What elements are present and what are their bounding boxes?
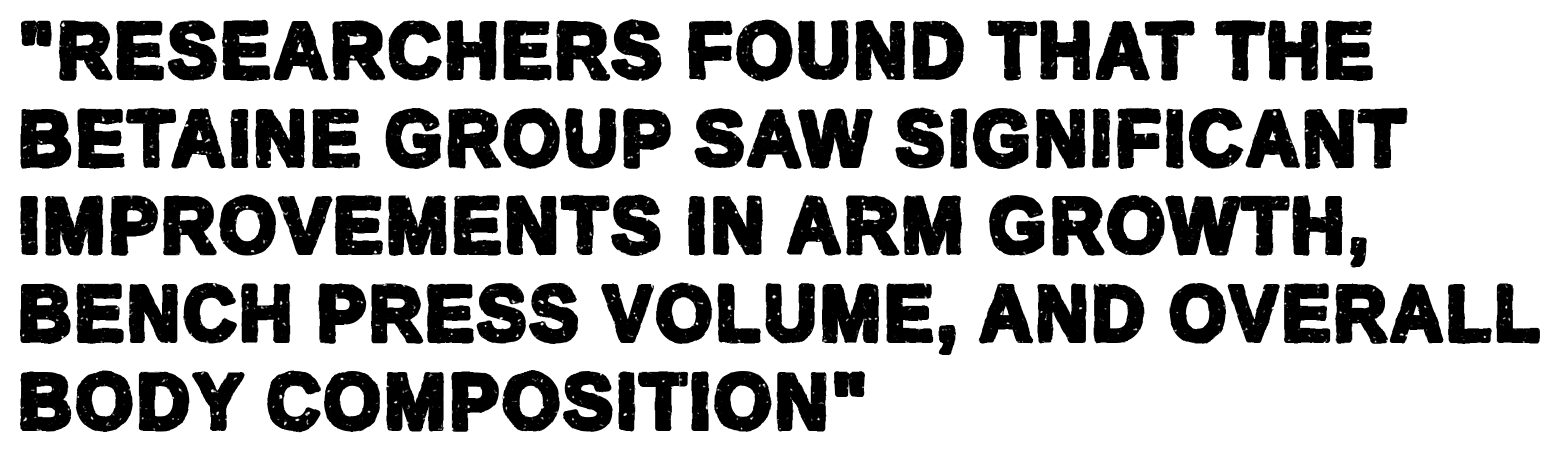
line 5: BODY COMPOSITION" — [19, 359, 871, 445]
line 1: "RESEARCHERS FOUND THAT THE — [19, 8, 1377, 94]
line 2: BETAINE GROUP SAW SIGNIFICANT — [19, 96, 1409, 182]
line 3: IMPROVEMENTS IN ARM GROWTH, — [19, 183, 1373, 269]
